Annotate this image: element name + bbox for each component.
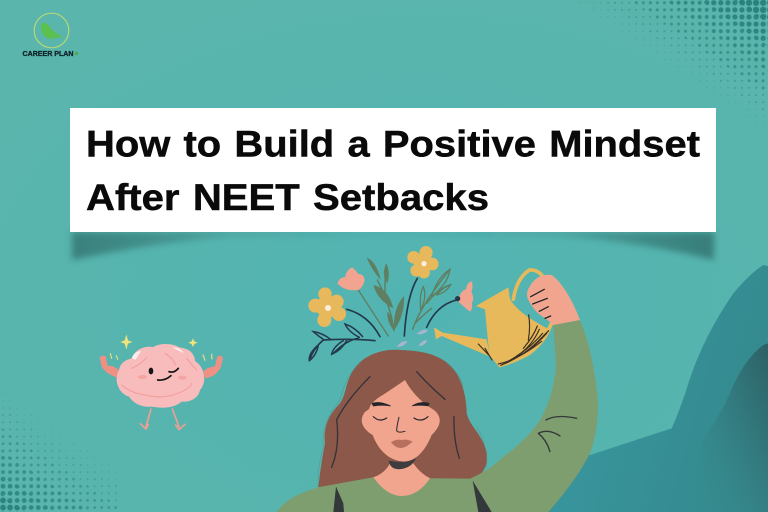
brain mascot [100, 334, 223, 430]
title line 2: After NEET Setbacks [86, 177, 489, 218]
brain arms [100, 356, 223, 378]
hills: bottom right [540, 265, 768, 512]
pink flower right [458, 281, 473, 312]
pink flower left [337, 267, 365, 290]
sparkles [120, 334, 198, 350]
halftone dots: bottom left [0, 390, 127, 512]
brain highlights [132, 348, 184, 360]
brain folds [122, 353, 197, 397]
brain body [117, 344, 204, 408]
sweater marks [538, 416, 577, 452]
nose [397, 417, 405, 432]
can body [476, 287, 551, 367]
can scratches [478, 315, 549, 365]
banner curled shadow [72, 232, 714, 260]
halftone dots: top right [575, 0, 768, 132]
hair [318, 350, 487, 487]
neck [373, 463, 430, 496]
logo wordmark: CAREER PLAN [22, 49, 74, 58]
watering can [434, 270, 552, 367]
can spout [434, 327, 490, 357]
logo: Career Plan [22, 13, 78, 58]
closed eyes [373, 417, 428, 420]
can handle [513, 270, 552, 330]
hand [527, 275, 580, 325]
fingers [531, 289, 551, 318]
brain legs [140, 409, 185, 430]
flower stems and leaves [309, 265, 457, 361]
brain cheeks [138, 375, 147, 379]
brain face [149, 368, 153, 374]
eyebrows [372, 402, 429, 406]
sweater [277, 320, 598, 512]
title banner [70, 108, 716, 232]
title line 1: How to Build a Positive Mindset [86, 124, 700, 164]
neck shadow [389, 458, 416, 469]
logo bird [41, 23, 64, 39]
logo dot [75, 52, 78, 55]
woman watering flowers illustration [277, 246, 598, 512]
top yellow flower [407, 246, 439, 278]
face [362, 380, 440, 462]
banner panel [70, 108, 716, 232]
left yellow flower [308, 287, 346, 327]
logo ring [34, 13, 69, 48]
water drops [397, 330, 428, 347]
lips [391, 440, 413, 448]
